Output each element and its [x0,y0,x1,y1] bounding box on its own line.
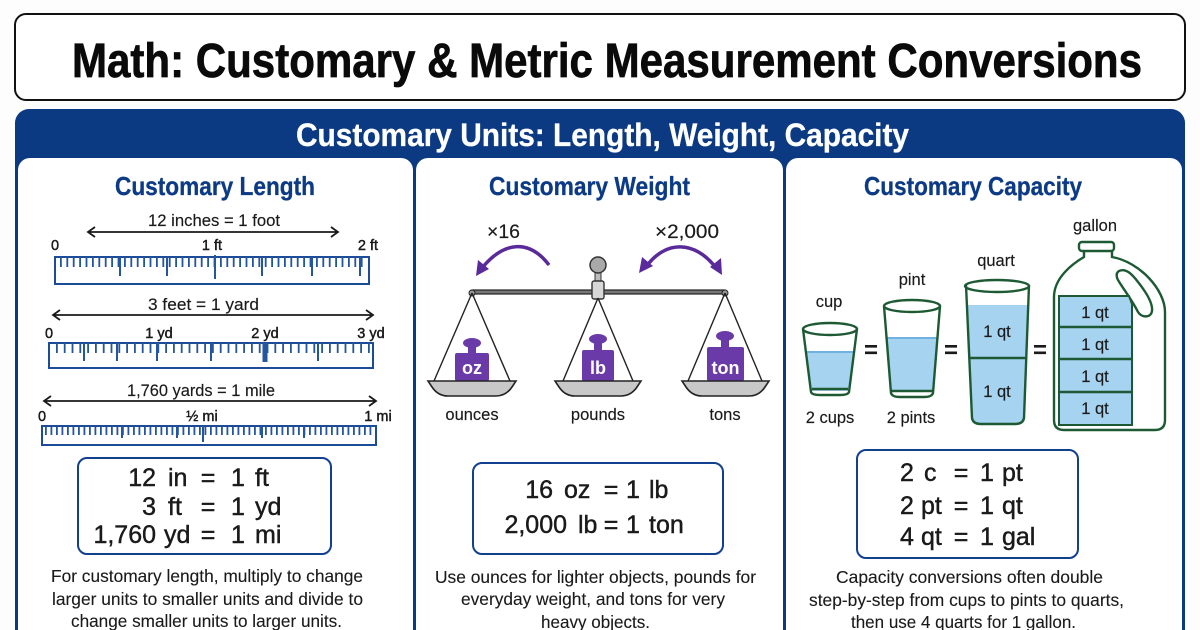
formula box: length: yd [164,521,190,549]
formula box: weight: = [604,476,618,504]
quart: quart [977,252,1015,270]
gallon jug: 1 qt [1081,400,1109,418]
heading: customary length: Customary Length [115,171,315,201]
ruler: yards to mile: 1 mi [364,409,392,425]
weight: tons: tons [709,406,741,424]
cup: cup [816,293,842,311]
formula box: length: ft [168,493,182,521]
ruler: inches to foot: 12 inches = 1 foot [148,212,280,230]
formula box: capacity: 4 [900,523,914,551]
weight: ounces: ounces [445,406,499,424]
formula box: weight: = [604,511,618,539]
formula box: capacity: 2 [900,459,914,487]
title banner [15,14,1185,100]
arrow: times 2,000: ×2,000 [655,222,719,243]
panel: customary capacity [786,158,1182,630]
quart: 1 qt [983,323,1011,341]
gallon jug: 1 qt [1081,368,1109,386]
pint: pint [899,271,926,289]
section band: customary units: Customary Units: Length, Weight, Capacity [296,117,909,153]
formula box: length: 12 [128,464,156,492]
formula box: length: = [201,464,215,492]
formula box: length: 1 [231,493,245,521]
pint [884,271,940,427]
arrow: times 2,000 [639,222,722,275]
formula box: capacity: qt [1002,492,1023,520]
gallon jug [1054,217,1165,430]
cup [803,293,857,427]
pint: 2 pints [887,409,935,427]
quart [965,252,1029,424]
weight: pounds: lb [590,358,606,378]
panel: customary weight [416,158,783,630]
formula box: weight [473,463,723,554]
formula box: weight: oz [564,476,590,504]
formula box: capacity: 2 [900,492,914,520]
formula box: capacity: 1 [980,459,994,487]
formula box: weight: 16 [525,476,553,504]
panel: customary length [18,158,413,630]
ruler: inches to foot [51,212,378,284]
formula box: length: mi [255,521,281,549]
description: length: larger units to smaller units and divide to [52,589,363,609]
ruler: yards to mile: ½ mi [186,409,218,425]
ruler: inches to foot: 0 [51,238,59,254]
description: weight: everyday weight, and tons for very [461,589,725,609]
weight: pounds [555,334,641,424]
ruler: inches to foot: 2 ft [358,238,378,254]
formula box: capacity: 1 [980,492,994,520]
formula box: weight: 2,000 [504,511,567,539]
formula box: length: = [201,521,215,549]
arrow: times 16 [476,222,549,276]
quart: 1 qt [983,383,1011,401]
formula box: capacity: = [954,492,968,520]
formula box: weight: 1 [626,511,640,539]
arrow: times 16: ×16 [487,222,520,243]
ruler: feet to yard: 3 feet = 1 yard [148,296,259,314]
formula box: capacity: gal [1002,523,1035,551]
balance scale [428,257,769,424]
formula box: length: 1 [231,464,245,492]
formula box: length: = [201,493,215,521]
formula box: length [78,458,331,554]
heading: customary weight: Customary Weight [489,171,690,201]
ruler: yards to mile [38,382,392,445]
heading: customary capacity: Customary Capacity [864,171,1082,201]
formula box: length: in [168,464,187,492]
formula box: length: yd [255,493,281,521]
cup: 2 cups [806,409,854,427]
description: capacity: Capacity conversions often double [836,567,1103,587]
gallon jug: 1 qt [1081,336,1109,354]
ruler: feet to yard [45,296,385,368]
ruler: feet to yard: 1 yd [145,326,173,342]
formula box: weight: lb [578,511,597,539]
ruler: inches to foot: 1 ft [202,238,222,254]
equals sign: = [944,337,958,364]
gallon jug: 1 qt [1081,304,1109,322]
formula box: capacity: = [954,523,968,551]
weight: pounds: pounds [571,406,625,424]
equals sign: = [864,337,878,364]
ruler: feet to yard: 2 yd [251,326,279,342]
gallon jug: gallon [1073,217,1117,235]
formula box: length: 1,760 [93,521,156,549]
description: length [51,566,363,630]
equals sign: = [1033,337,1047,364]
formula box: weight: lb [649,476,668,504]
formula box: weight: 1 [626,476,640,504]
formula box: capacity: pt [921,492,942,520]
formula box: capacity: pt [1002,459,1023,487]
formula box: capacity [857,450,1078,558]
formula box: length: ft [255,464,269,492]
ruler: yards to mile: 0 [38,409,46,425]
formula box: capacity: c [924,459,936,487]
formula box: length: 3 [142,493,156,521]
description: capacity: step-by-step from cups to pints to quarts, [809,590,1124,610]
weight: ounces: oz [462,358,482,378]
weight: tons [682,331,769,424]
weight: tons: ton [712,358,739,378]
description: capacity [809,567,1124,630]
description: length: For customary length, multiply to change [51,566,363,586]
formula box: capacity: = [954,459,968,487]
ruler: feet to yard: 3 yd [357,326,385,342]
ruler: feet to yard: 0 [45,326,53,342]
formula box: capacity: qt [921,523,942,551]
description: weight [435,567,756,630]
weight: ounces [428,338,516,424]
formula box: capacity: 1 [980,523,994,551]
description: weight: Use ounces for lighter objects, pounds for [435,567,756,587]
formula box: length: 1 [231,521,245,549]
ruler: yards to mile: 1,760 yards = 1 mile [127,382,275,400]
formula box: weight: ton [649,511,684,539]
